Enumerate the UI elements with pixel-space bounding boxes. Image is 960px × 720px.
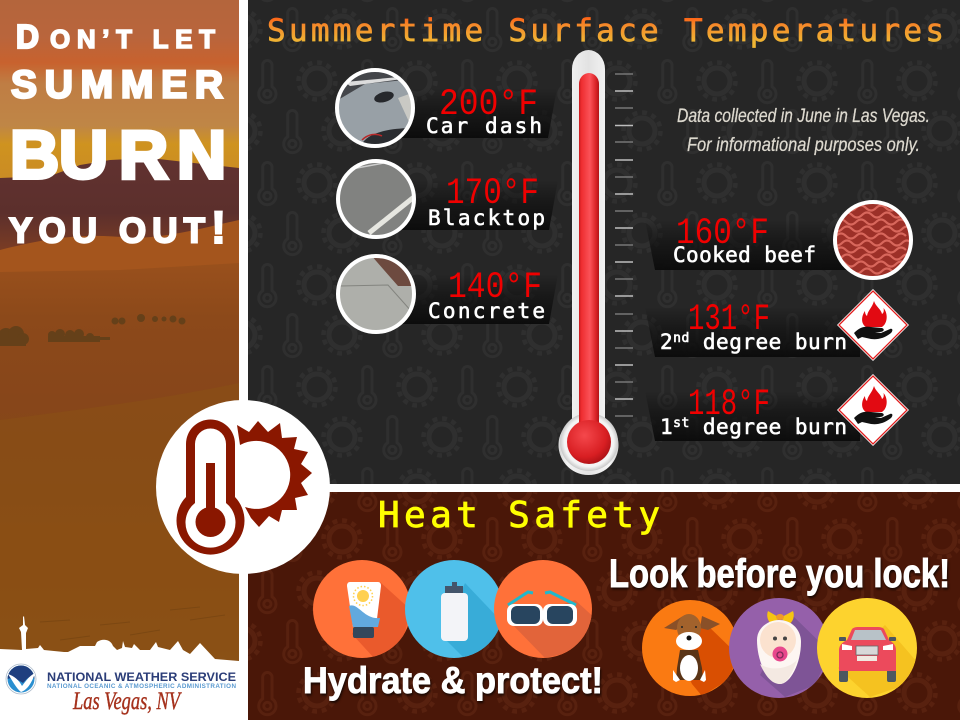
dark streaks [40,607,225,640]
scale ticks [615,74,633,416]
value: 200°F [439,84,538,126]
label: st [673,416,689,431]
item: concrete 140F [336,254,558,334]
item: cooked beef 160F [645,200,913,280]
icon: burn hazard diamond [837,374,909,446]
label: Car dash [426,114,542,138]
value: 140°F [448,267,542,309]
logo: NOAA [6,664,36,694]
title: summertime surface temperatures: Summertime Surface Temperatures [267,13,944,49]
bushes [0,314,186,346]
photo: ground beef [837,204,909,276]
heading: don't let summer burn you out: D [16,18,39,55]
icon: burn hazard diamond [837,289,909,361]
icon: dog [642,600,738,696]
skyline silhouette [0,616,239,720]
panel: desert photo [0,0,239,720]
icon: thermometer and sun badge [156,400,330,574]
icon: car [817,598,917,698]
text: hydrate and protect: Hydrate & protect! [303,660,603,701]
label: 1 [660,415,673,439]
icon: sunscreen [313,560,411,658]
value: 160°F [676,213,769,255]
panel: dark temperature background [248,0,960,484]
heading: don't let summer burn you out: YOU OUT [9,212,205,250]
value: 170°F [446,173,539,215]
heading: don't let summer burn you out: ON’T LET [50,24,220,54]
label: Cooked beef [673,243,816,267]
item: car dash 200F [335,68,557,148]
item: first degree burn 118F [645,374,909,446]
heading: heat safety: Heat Safety [378,495,660,536]
text: Las Vegas, NV: Las Vegas, NV [72,688,182,715]
icon: sunglasses [494,560,597,658]
note: data source [677,106,930,156]
icon: baby [729,598,830,698]
label: Blacktop [428,206,545,230]
text: National Weather Service: NATIONAL WEATHER SERVICE [47,672,236,684]
value: 131°F [688,299,770,341]
panel: white divider [239,0,248,720]
label: degree burn [690,415,847,439]
photo: car dash [339,72,411,144]
label: degree burn [690,330,847,354]
note: data source: For informational purposes only. [687,135,920,156]
label: Concrete [428,299,545,323]
heading: don't let summer burn you out [9,18,226,253]
label: nd [673,331,689,346]
panel: heat safety background [248,492,960,720]
photo: concrete [340,258,412,330]
heading: don't let summer burn you out: ! [211,202,226,253]
item: blacktop 170F [336,159,558,239]
label: 2 [660,330,673,354]
heading: don't let summer burn you out: BURN [10,117,226,193]
item: second degree burn 131F [645,289,909,361]
value: 118°F [688,384,770,426]
text: NOAA name: NATIONAL OCEANIC & ATMOSPHERIC ADMINISTRATION [47,683,236,690]
icon: water bottle [405,560,504,658]
heading: don't let summer burn you out: SUMMER [11,64,223,106]
photo: blacktop [340,163,412,235]
thermometer [558,50,633,475]
